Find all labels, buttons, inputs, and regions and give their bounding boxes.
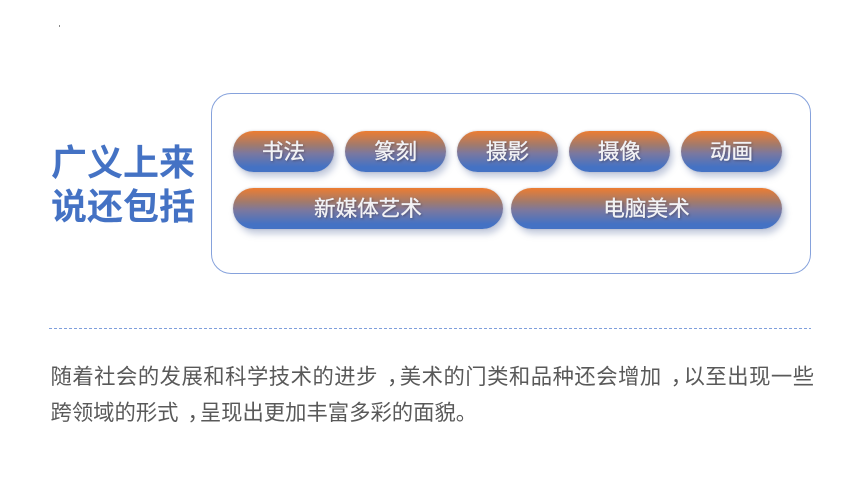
- pill: 新媒体艺术: [233, 188, 503, 229]
- pill: 新媒体艺术: 新媒体艺术: [314, 196, 422, 221]
- pill: 书法: [233, 131, 334, 172]
- heading: 广义上来说还包括: 说还包括: [51, 186, 195, 227]
- body text: ，: [387, 365, 409, 389]
- pill: 电脑美术: 电脑美术: [603, 196, 690, 221]
- body text: ，: [671, 365, 693, 389]
- pill: 篆刻: [345, 131, 446, 172]
- body text: [50, 365, 815, 425]
- pill: 摄影: [457, 131, 558, 172]
- pill: 书法: 书法: [262, 139, 305, 164]
- small dot mark: [59, 25, 60, 27]
- heading: 广义上来说还包括: [51, 142, 195, 227]
- pill: 电脑美术: [511, 188, 782, 229]
- panel: categories: [211, 93, 811, 274]
- heading: 广义上来说还包括: 广义上来: [51, 142, 195, 183]
- pill: 摄像: 摄像: [598, 139, 641, 164]
- pill: 摄影: 摄影: [486, 139, 529, 164]
- body text: ，: [187, 401, 209, 425]
- body text: 随着社会的发展和科学技术的进步 美术的门类和品种还会增加 以至出现一些: [50, 365, 815, 389]
- pill: 动画: 动画: [710, 139, 753, 164]
- pill: 动画: [681, 131, 782, 172]
- body text: 跨领域的形式 呈现出更加丰富多彩的面貌。: [50, 401, 477, 425]
- pill: 篆刻: 篆刻: [374, 139, 417, 164]
- pill: 摄像: [569, 131, 670, 172]
